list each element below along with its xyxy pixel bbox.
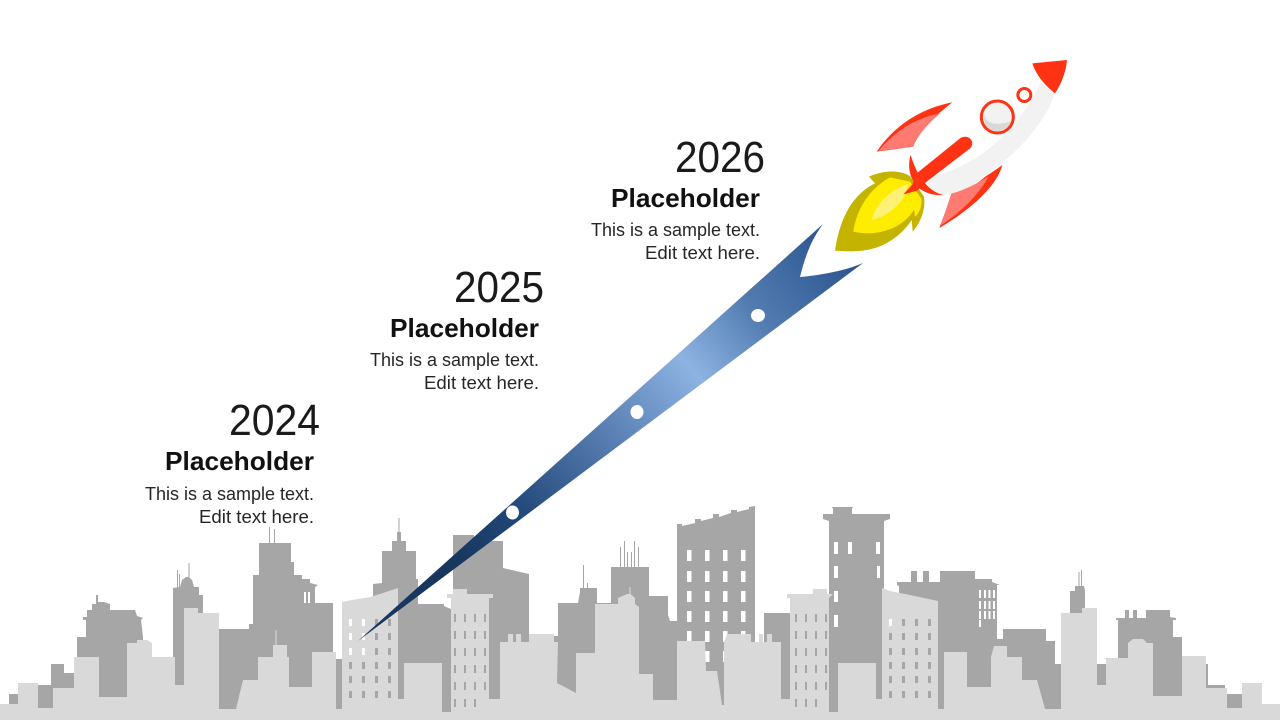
body: 2024 line 1: This is a sample text. — [145, 484, 314, 504]
year: 2026: 2026 — [675, 133, 765, 182]
body: 2024 line 2: Edit text here. — [199, 507, 314, 527]
icon: lower fin — [939, 165, 1002, 228]
city skyline: front layer — [0, 587, 1280, 720]
icon: engine base and stripe — [903, 137, 972, 195]
text block: 2024 — [145, 396, 320, 527]
rocket — [835, 60, 1067, 251]
white windows on front-layer buildings — [349, 619, 892, 655]
heading: 2024: Placeholder — [165, 446, 314, 476]
body: 2026 line 2: Edit text here. — [645, 243, 760, 263]
icon: flame — [835, 171, 924, 251]
body: 2025 line 2: Edit text here. — [424, 373, 539, 393]
icon: rocket body — [911, 63, 1055, 195]
year: 2024: 2024 — [229, 396, 320, 445]
icon: nose cone — [1032, 60, 1067, 93]
heading: 2026: Placeholder — [611, 183, 760, 213]
city skyline: back layer — [9, 506, 1242, 712]
heading: 2025: Placeholder — [390, 313, 539, 343]
rocket trail with timeline markers — [358, 224, 863, 641]
icon: large porthole — [981, 101, 1013, 133]
year: 2025: 2025 — [454, 263, 544, 312]
body: 2025 line 1: This is a sample text. — [370, 350, 539, 370]
marker: 2026 — [751, 309, 765, 322]
text block: 2026 — [591, 133, 765, 263]
building windows on front layer — [349, 614, 931, 707]
marker: 2024 — [506, 506, 519, 520]
marker: 2025 — [630, 405, 644, 419]
icon: small porthole — [1018, 88, 1031, 101]
icon: upper fin — [877, 102, 952, 152]
body: 2026 line 1: This is a sample text. — [591, 220, 760, 240]
white windows in back-layer towers — [304, 542, 995, 662]
text block: 2025 — [370, 263, 544, 393]
antennas — [97, 518, 1082, 600]
